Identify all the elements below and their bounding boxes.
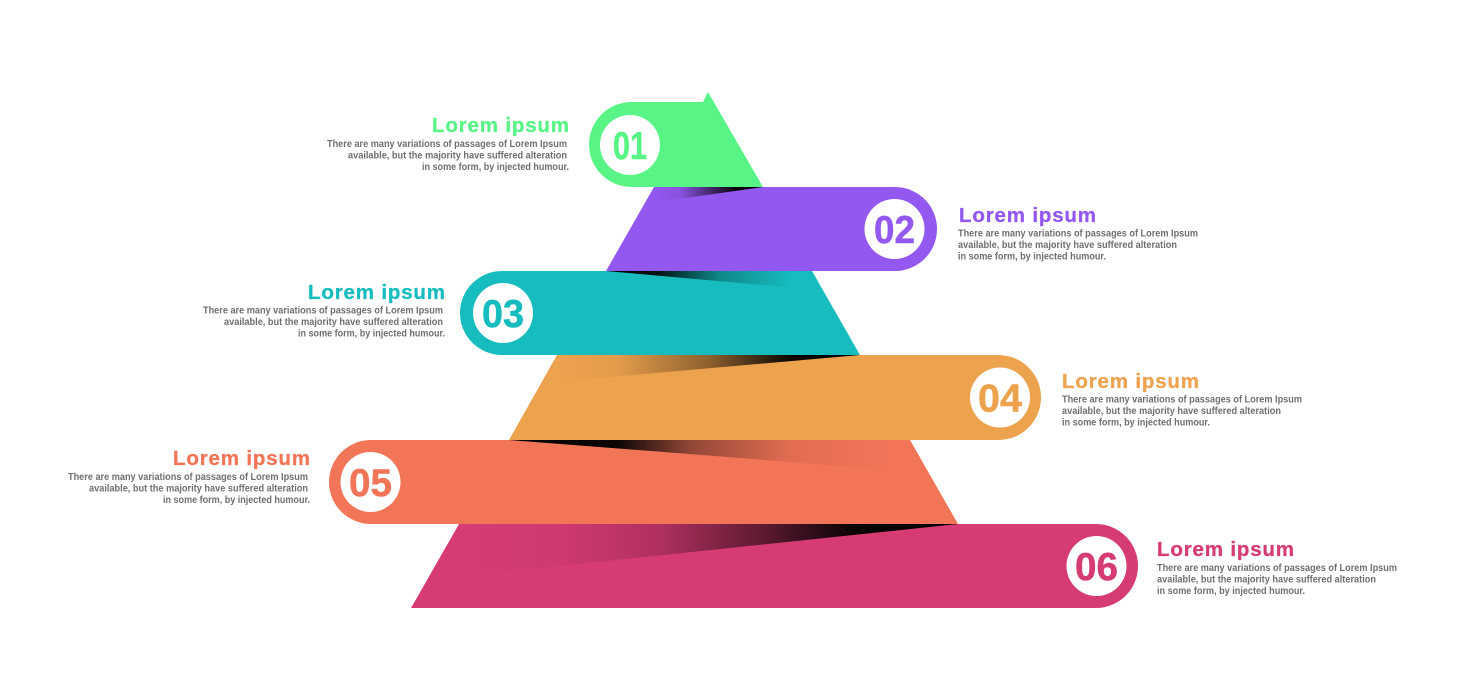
text block 04: available, but the majority have suffered alteration bbox=[1062, 406, 1281, 417]
text block 06 bbox=[1157, 538, 1397, 597]
text block 03: There are many variations of passages of Lorem Ipsum bbox=[203, 306, 443, 316]
text block 05: available, but the majority have suffered alteration bbox=[89, 484, 308, 494]
text block 06: available, but the majority have suffered alteration bbox=[1157, 574, 1376, 586]
band 03: teal: 03 bbox=[482, 293, 524, 336]
text block 01: in some form, by injected humour. bbox=[422, 162, 569, 173]
band 02: purple: 02 bbox=[874, 209, 915, 252]
text block 02: Lorem ipsum bbox=[959, 204, 1096, 227]
text block 06: in some form, by injected humour. bbox=[1157, 586, 1305, 597]
band 03: teal bbox=[460, 271, 860, 355]
text block 03: available, but the majority have suffered alteration bbox=[224, 317, 443, 328]
text block 02: in some form, by injected humour. bbox=[958, 252, 1106, 262]
text block 02 bbox=[958, 204, 1198, 262]
band 05: coral bbox=[329, 440, 958, 524]
text block 03 bbox=[203, 281, 445, 340]
band 06: pink: 06 bbox=[1075, 546, 1118, 589]
text block 04: in some form, by injected humour. bbox=[1062, 418, 1210, 428]
text block 05 bbox=[68, 447, 310, 506]
text block 05: There are many variations of passages of Lorem Ipsum bbox=[68, 472, 308, 483]
band 01: green pyramid tip bbox=[589, 92, 763, 187]
band 02: purple bbox=[606, 187, 937, 271]
text block 04: There are many variations of passages of Lorem Ipsum bbox=[1062, 394, 1302, 406]
text block 05: Lorem ipsum bbox=[173, 447, 310, 470]
band 01: green pyramid tip: 01 bbox=[613, 125, 647, 168]
band 04: orange bbox=[509, 355, 1041, 440]
text block 02: available, but the majority have suffered alteration bbox=[958, 240, 1177, 251]
text block 06: Lorem ipsum bbox=[1157, 538, 1294, 561]
text block 01: There are many variations of passages of Lorem Ipsum bbox=[327, 139, 567, 150]
text block 03: Lorem ipsum bbox=[308, 281, 445, 304]
text block 03: in some form, by injected humour. bbox=[298, 328, 445, 340]
text block 01 bbox=[327, 114, 569, 173]
text block 06: There are many variations of passages of Lorem Ipsum bbox=[1157, 563, 1397, 574]
text block 02: There are many variations of passages of Lorem Ipsum bbox=[958, 228, 1198, 240]
band 04: orange: 04 bbox=[978, 378, 1022, 420]
band 06: pink bbox=[411, 524, 1138, 608]
text block 04 bbox=[1062, 370, 1302, 428]
text block 01: Lorem ipsum bbox=[432, 114, 569, 137]
text block 04: Lorem ipsum bbox=[1062, 370, 1199, 393]
text block 01: available, but the majority have suffered alteration bbox=[348, 150, 567, 162]
text block 05: in some form, by injected humour. bbox=[163, 495, 310, 506]
band 05: coral: 05 bbox=[349, 462, 392, 505]
